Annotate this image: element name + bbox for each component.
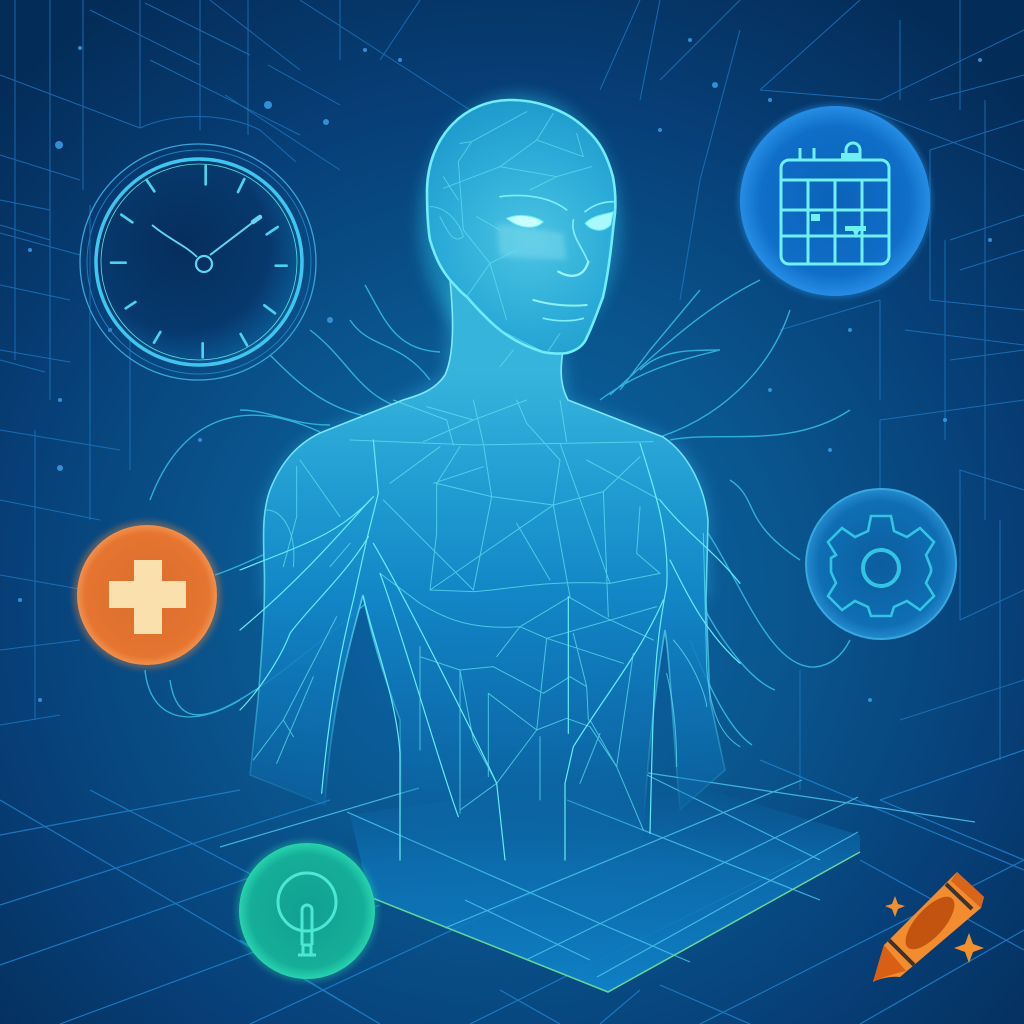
face features — [430, 112, 613, 367]
brows and nose — [500, 195, 613, 321]
neural fibres to icons — [145, 280, 850, 745]
head glow — [420, 95, 620, 355]
icon: calendar — [738, 104, 932, 298]
icon: clock — [80, 144, 316, 380]
icon: light bulb — [236, 840, 378, 982]
icon: crayon logo — [873, 872, 984, 982]
eyes — [507, 215, 543, 227]
icon: medical cross — [73, 521, 221, 669]
floor platform — [220, 772, 975, 992]
main trunks — [240, 440, 740, 860]
chest web — [253, 400, 740, 830]
data specks — [18, 38, 992, 702]
vein network — [240, 400, 740, 860]
head veins — [430, 112, 592, 367]
figure — [240, 95, 740, 870]
floor grid — [0, 750, 1024, 1024]
background circuit grid lines — [0, 0, 1024, 790]
cheek highlight — [497, 223, 567, 260]
icon: gear — [806, 489, 956, 639]
body glow — [264, 280, 708, 600]
torso, neck and arms — [250, 280, 725, 870]
head — [427, 100, 615, 354]
